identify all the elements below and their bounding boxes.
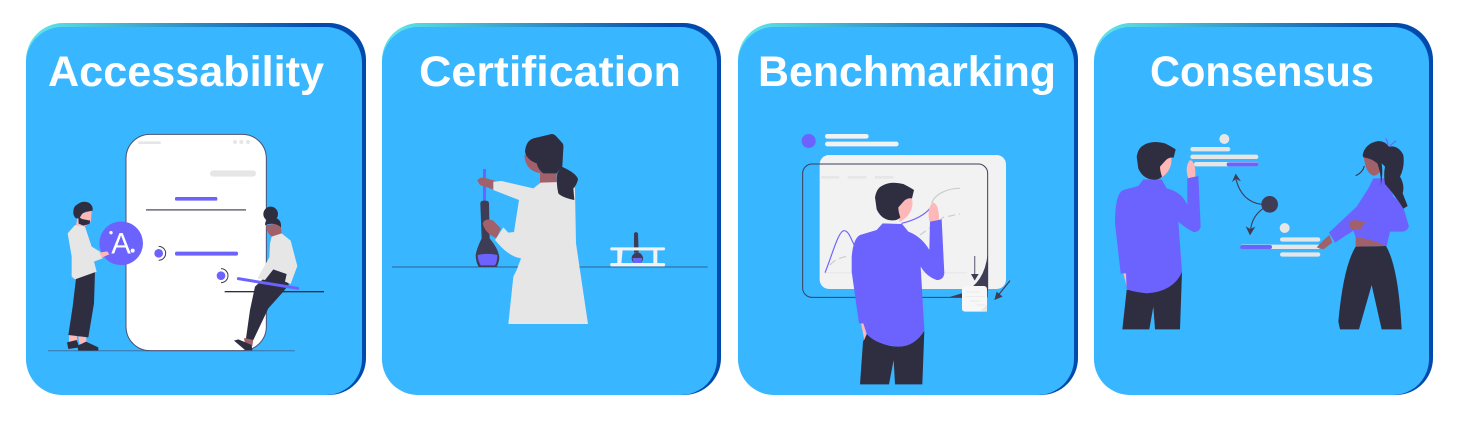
- badge: letter A: [99, 221, 143, 265]
- flask with purple liquid: [476, 169, 499, 267]
- bench line: [392, 266, 708, 268]
- scientist in lab coat: [477, 134, 588, 324]
- panel: accessability: [26, 23, 366, 395]
- heading: certification: Certification: [419, 48, 681, 96]
- panel: certification: [382, 23, 721, 395]
- connector node with arrows: [1232, 174, 1278, 235]
- illustration: man at chart board: [802, 134, 1010, 384]
- badge: letter A: A: [111, 227, 131, 260]
- upper bars: [1190, 134, 1258, 166]
- ground line: [48, 350, 295, 351]
- panel: benchmarking: [738, 23, 1078, 395]
- person from behind: [852, 183, 944, 384]
- phone screen: [126, 134, 324, 351]
- illustration: phone with two people: [48, 134, 324, 351]
- person: man holding badge: [67, 202, 103, 351]
- chart board: [803, 155, 1006, 297]
- heading: benchmarking: Benchmarking: [758, 48, 1056, 96]
- heading: consensus: Consensus: [1150, 48, 1374, 96]
- legend dot and bars: [802, 134, 899, 148]
- lower bars: [1240, 223, 1320, 257]
- heading: accessability: Accessability: [48, 48, 324, 96]
- person: woman sitting with bar: [234, 207, 298, 351]
- person: woman with ponytail: [1317, 138, 1409, 329]
- illustration: two people sharing bars: [1115, 134, 1409, 329]
- arrows and paper note: [962, 256, 1010, 312]
- test tube rack: [610, 232, 665, 266]
- person: man from behind: [1115, 142, 1201, 329]
- panel: consensus: [1094, 23, 1433, 395]
- illustration: scientist with flask: [392, 134, 708, 324]
